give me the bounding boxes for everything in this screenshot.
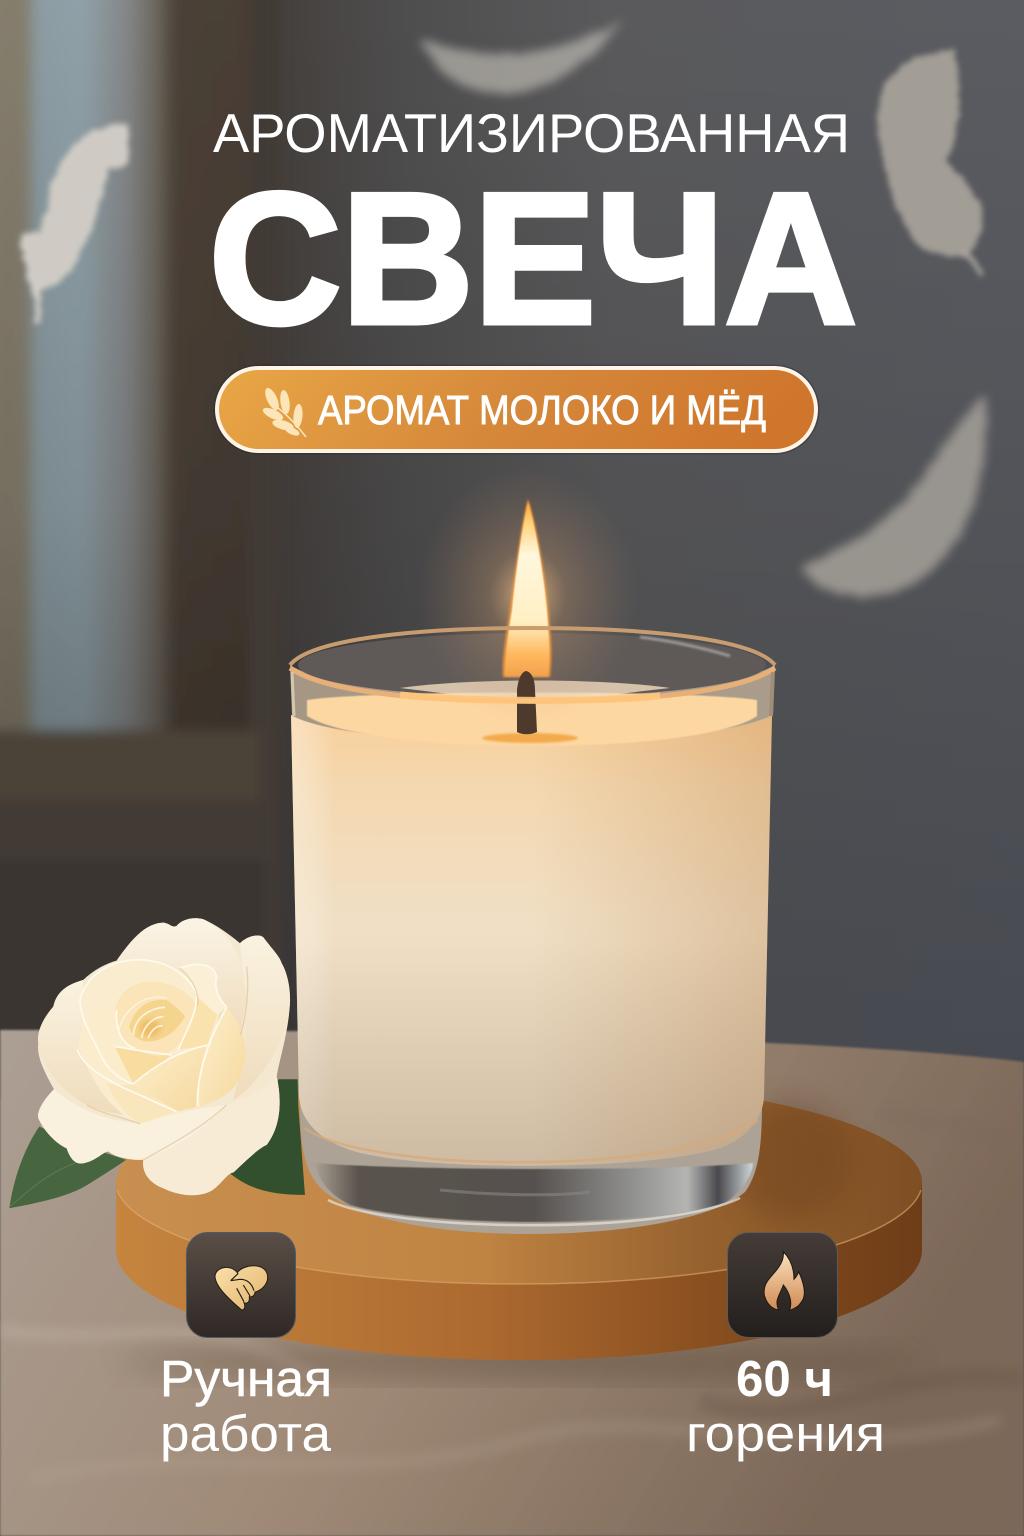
low left petal <box>107 1083 177 1124</box>
feather: top <box>420 20 622 93</box>
glass base <box>300 1100 762 1234</box>
icon tile: heart hands <box>186 1232 296 1338</box>
small center petal <box>113 1047 172 1084</box>
wick <box>517 671 537 734</box>
flame glow <box>418 465 638 725</box>
inner glass back <box>298 633 766 697</box>
badge text: АРОМАТ МОЛОКО И МЁД <box>318 387 766 433</box>
feather: right <box>802 395 986 596</box>
wax side shading <box>291 715 772 1166</box>
label: burning: горения <box>686 1405 885 1462</box>
center right petal <box>178 997 217 1050</box>
icon: wheat sprig <box>261 386 306 438</box>
back wax band <box>400 680 670 704</box>
marble table <box>0 1030 1024 1536</box>
bottom right petal <box>143 1077 280 1195</box>
rose heart <box>129 1000 185 1042</box>
feature: handmade <box>160 1232 332 1462</box>
blurred window <box>0 0 280 1040</box>
candle flame <box>503 499 551 677</box>
glass wall upper <box>290 665 775 743</box>
icon tile: flame <box>728 1232 838 1338</box>
title line 1: АРОМАТИЗИРОВАННАЯ <box>213 102 850 164</box>
scent pill badge <box>216 367 817 452</box>
feature: handmade: работа <box>160 1405 332 1462</box>
wax bottom line <box>305 1120 758 1162</box>
upper right fold <box>180 964 227 1015</box>
rose leaves <box>9 1079 305 1208</box>
background wall <box>0 0 1024 1100</box>
white rose <box>38 918 290 1195</box>
right petal <box>233 936 290 1101</box>
wax lower shading <box>291 715 772 1166</box>
glass rim <box>290 628 775 716</box>
front center petal <box>133 1045 207 1112</box>
feather: left <box>20 123 129 322</box>
feature: burn time <box>686 1232 885 1462</box>
title line 2: СВЕЧА <box>209 154 857 363</box>
cup back <box>78 960 220 1124</box>
inner right petal <box>199 1007 246 1107</box>
label: handmade: Ручная <box>160 1350 332 1407</box>
petal edges <box>77 960 227 1112</box>
rose silhouette <box>38 918 290 1195</box>
wax melt surface <box>307 692 757 746</box>
feather: top right <box>878 50 983 274</box>
melt pool <box>482 733 578 743</box>
wax <box>291 715 772 1166</box>
inner petals <box>115 982 197 1057</box>
back petal <box>117 918 247 1033</box>
candle glass body <box>290 633 775 1234</box>
rose spiral <box>118 997 167 1038</box>
main title <box>209 102 857 363</box>
rose center shade <box>139 1020 161 1037</box>
wooden tray <box>116 1080 922 1360</box>
left inner petal <box>78 1000 133 1084</box>
label: 60 hours: 60 ч <box>736 1350 833 1407</box>
left petal <box>38 980 124 1115</box>
bottom left petal <box>38 1089 227 1163</box>
